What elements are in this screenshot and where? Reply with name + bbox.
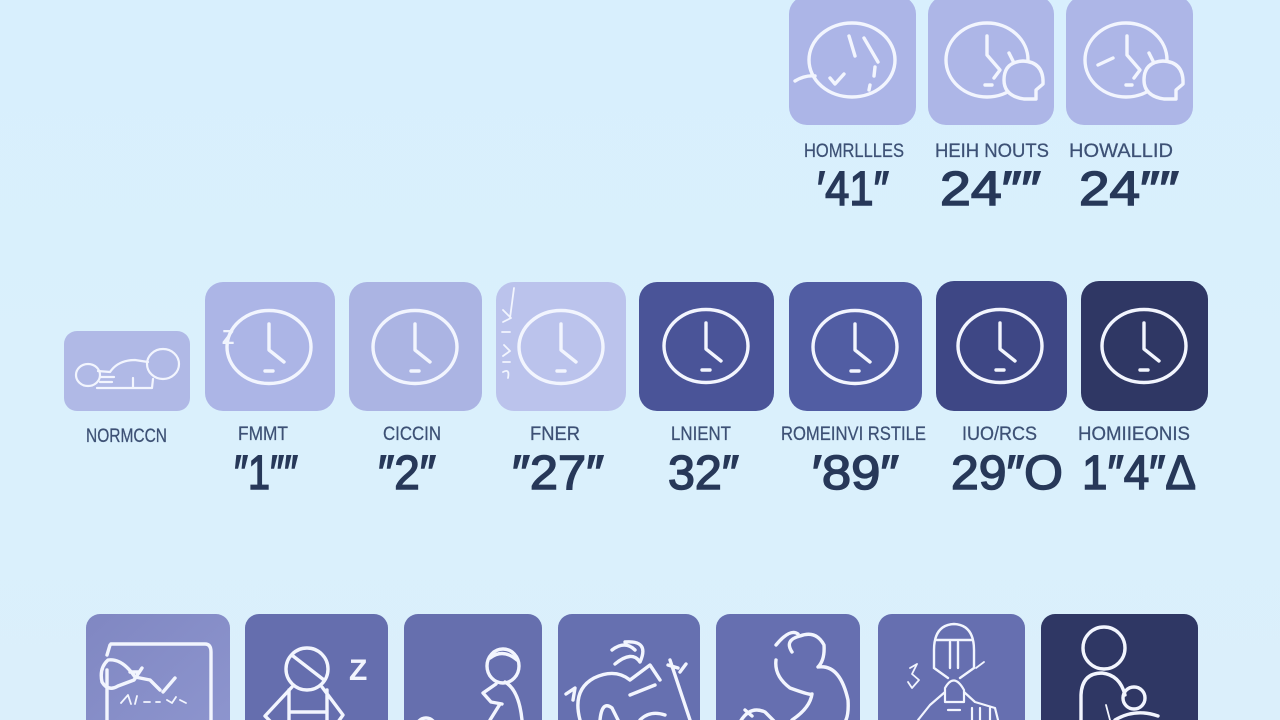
icon: sleeping baby bbox=[76, 349, 179, 388]
icon: clock bbox=[664, 310, 748, 382]
card: bottom 6 bbox=[878, 614, 1025, 720]
value: 32″ bbox=[668, 447, 739, 500]
icon: sleeping child with Z bbox=[265, 648, 367, 720]
value: 24″″ bbox=[940, 163, 1041, 216]
icon: z: Z bbox=[222, 327, 234, 349]
card: mid 3 bbox=[496, 282, 626, 500]
label: HOMRLLLES bbox=[804, 141, 904, 162]
label: IUO/RCS bbox=[962, 424, 1037, 445]
card: newborn bbox=[64, 331, 190, 447]
icon: sleeping child with Z: Z bbox=[349, 654, 367, 687]
icon: clock bbox=[813, 310, 897, 384]
card: top row 1 bbox=[789, 0, 916, 216]
label: FNER bbox=[530, 424, 580, 445]
icon: clock with baby head bbox=[1085, 23, 1183, 99]
value: ′41″ bbox=[817, 163, 889, 216]
card: bottom 1 bbox=[86, 614, 230, 720]
value: 1″4″Δ bbox=[1082, 447, 1196, 500]
icon: parent holding baby bbox=[416, 649, 522, 720]
value: ″2″ bbox=[378, 447, 436, 500]
icon: parent cradling baby bbox=[740, 632, 848, 720]
icon: clock bbox=[519, 310, 603, 384]
icon: clock bbox=[373, 310, 457, 384]
value: ″27″ bbox=[512, 447, 604, 500]
value: 24″″ bbox=[1079, 163, 1179, 216]
label: HOWALLID bbox=[1069, 141, 1173, 162]
value: 29″O bbox=[951, 447, 1063, 500]
icon: curled parent and baby bbox=[566, 642, 690, 720]
icon: clock bbox=[1102, 310, 1186, 382]
icon: sleep marks bbox=[502, 288, 514, 378]
card: bottom 4 bbox=[558, 614, 700, 720]
card: top row 2 bbox=[928, 0, 1054, 216]
label: FMMT bbox=[238, 424, 288, 445]
icon: clock bbox=[958, 310, 1042, 382]
card: bottom 2 bbox=[245, 614, 388, 720]
value: ′89″ bbox=[812, 447, 899, 500]
value: ″1″″ bbox=[234, 447, 298, 500]
icon: parent and child bbox=[1081, 627, 1158, 720]
icon: clock speech bubble bbox=[795, 23, 895, 97]
card: bottom 3 bbox=[404, 614, 542, 720]
icon: clock bbox=[227, 310, 311, 384]
card: mid 2 bbox=[349, 282, 482, 500]
label: HEIH NOUTS bbox=[935, 141, 1049, 162]
card: mid 4 bbox=[639, 282, 774, 500]
label: HOMIIEONIS bbox=[1078, 424, 1190, 445]
card: bottom 5 bbox=[716, 614, 860, 720]
card: top row 3 bbox=[1066, 0, 1193, 216]
icon: detailed figure bbox=[908, 624, 998, 720]
label: CICCIN bbox=[383, 424, 441, 445]
label: ROMEINVI RSTILE bbox=[781, 424, 926, 445]
label: NORMCCN bbox=[86, 426, 167, 447]
card: bottom 7 bbox=[1041, 614, 1198, 720]
card: mid 7 bbox=[1078, 281, 1208, 500]
card: mid 5 bbox=[781, 282, 926, 500]
label: LNIENT bbox=[671, 424, 731, 445]
icon: clock with baby head bbox=[946, 23, 1043, 99]
card: mid 1 bbox=[205, 282, 335, 500]
card: mid 6 bbox=[936, 281, 1067, 500]
icon: chart with hand bbox=[101, 644, 211, 720]
